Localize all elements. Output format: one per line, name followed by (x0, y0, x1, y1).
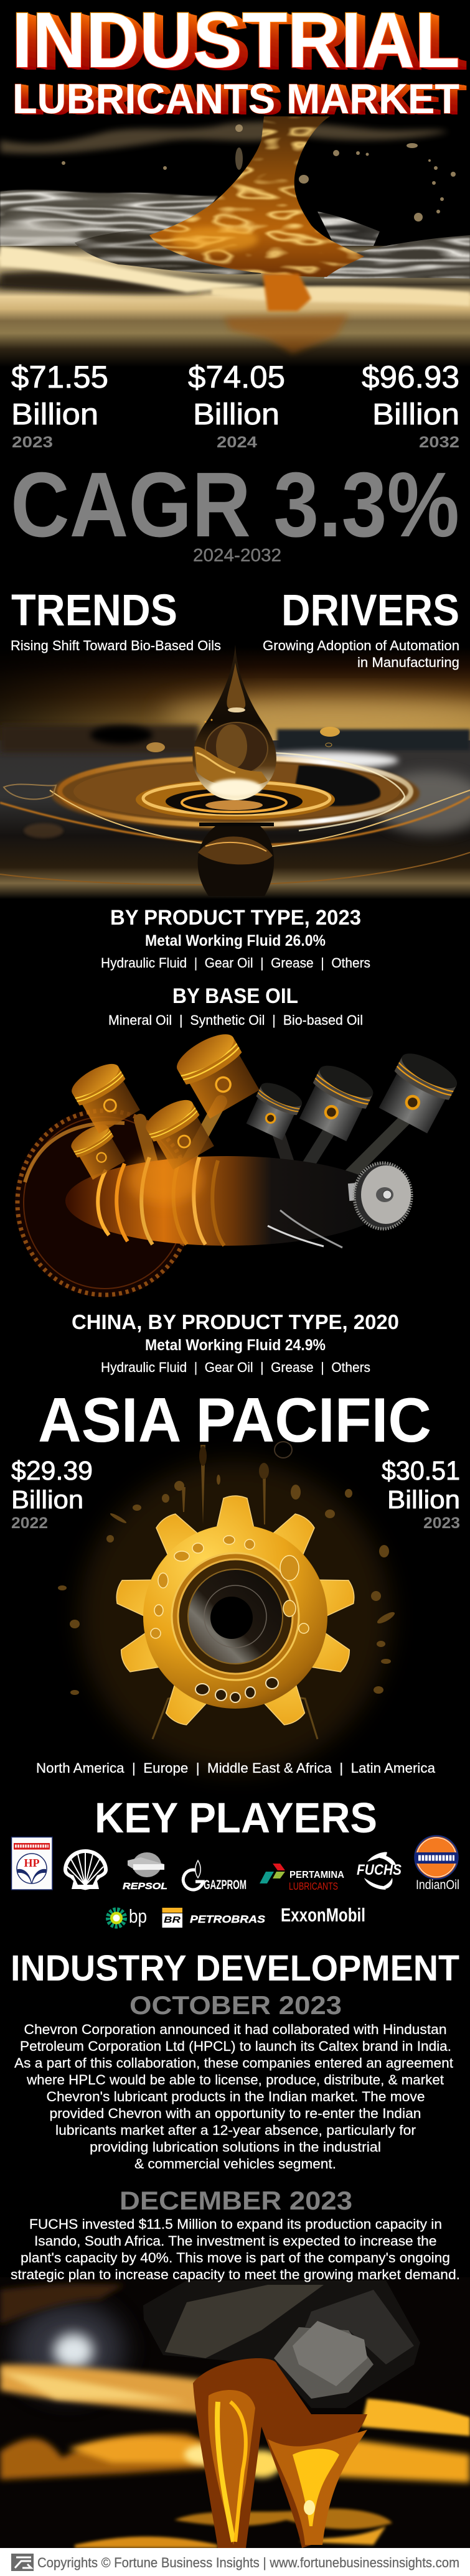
development: October 2023: Chevron Corporation announced it had collaborated with Hindustan (24, 2022, 447, 2037)
logo: Pertamina Lubricants: PERTAMINA (289, 1870, 344, 1880)
logo: FUCHS: FUCHS (357, 1862, 402, 1878)
drop reflection (198, 824, 274, 896)
development: December 2023: Isando, South Africa. The investment is expected to increase the (34, 2233, 437, 2249)
drivers (263, 586, 459, 670)
stat: Asia Pacific 2022: Billion (11, 1485, 83, 1514)
heading: by product type (101, 906, 370, 971)
drivers: in Manufacturing (357, 655, 459, 670)
regions list: North America | Europe | Middle East & Africa | Latin America (36, 1760, 436, 1776)
development: October 2023: Chevron's lubricant products in the Indian market. The move (46, 2089, 425, 2104)
development: December 2023: strategic plan to increase capacity to meet the growing market demand. (11, 2267, 460, 2282)
photo: oil splash (0, 116, 470, 367)
development: October 2023 (14, 1990, 453, 2172)
development: December 2023 (11, 2186, 460, 2282)
stat: Asia Pacific 2022: 2022 (11, 1514, 48, 1532)
logo: IndianOil (415, 1836, 459, 1892)
development: October 2023: where HPLC would be able to license, produce, distribute, & market (26, 2072, 444, 2088)
drivers: Growing Adoption of Automation (263, 638, 459, 653)
logo: HP (11, 1837, 52, 1890)
logo: Petrobras (162, 1908, 266, 1928)
title (12, 0, 460, 123)
stat: 2024 (188, 360, 285, 451)
heading: industry development: INDUSTRY DEVELOPMENT (11, 1948, 459, 1989)
heading: China by product type: CHINA, BY PRODUCT TYPE, 2020 (72, 1310, 399, 1333)
trends: TRENDS (11, 586, 177, 635)
logo: ExxonMobil: ExxonMobil (281, 1904, 365, 1926)
development: December 2023: FUCHS invested $11.5 Million to expand its production capacity in (29, 2216, 442, 2232)
development: October 2023: As a part of this collaboration, these companies entered an agreement (14, 2055, 453, 2071)
heading: by product type: BY PRODUCT TYPE, 2023 (110, 906, 361, 930)
logo: Petrobras: BR (164, 1915, 181, 1925)
CAGR: 2024-2032 (193, 546, 281, 566)
stat: 2023: 2023 (12, 434, 53, 451)
development: October 2023: provided Chevron with an opportunity to re-enter the Indian (50, 2106, 421, 2121)
stat: 2032: Billion (372, 398, 459, 431)
stat: 2032: $96.93 (362, 360, 459, 394)
logo: bp: bp (129, 1905, 147, 1927)
heading: by base oil: Mineral Oil | Synthetic Oil | Bio-based Oil (108, 1012, 363, 1028)
stat: Asia Pacific 2023 (382, 1456, 460, 1532)
logo: Gazprom: GAZPROM (204, 1878, 247, 1892)
stat: 2032 (362, 360, 459, 451)
stat: 2023: $71.55 (11, 360, 108, 394)
logo: Pertamina Lubricants (260, 1864, 344, 1892)
stat: 2024: $74.05 (188, 360, 285, 394)
logo: Gazprom (183, 1860, 247, 1892)
development: October 2023: providing lubrication solutions in the industrial (90, 2139, 381, 2155)
title line 2: LUBRICANTS MARKET: LUBRICANTS MARKET (12, 75, 459, 123)
photo: oil drop and ripples (0, 645, 470, 899)
logo: Shell (63, 1849, 108, 1890)
logo: IndianOil: IndianOil (416, 1878, 459, 1892)
stat: 2024: Billion (193, 398, 280, 431)
stat: 2024: 2024 (217, 434, 257, 451)
logo: Repsol (123, 1852, 167, 1892)
stat: Asia Pacific 2023: $30.51 (382, 1456, 460, 1486)
illustration: engine crankshaft with pistons (15, 1027, 462, 1297)
development: December 2023: DECEMBER 2023 (120, 2186, 352, 2215)
development: October 2023: & commercial vehicles segment. (134, 2156, 336, 2172)
development: December 2023: plant's capacity by 40%. This move is part of the company's ongoing (21, 2250, 450, 2266)
trends (11, 586, 221, 653)
heading: by base oil (108, 984, 363, 1028)
heading: China by product type: Hydraulic Fluid | Gear Oil | Grease | Others (101, 1360, 370, 1375)
logo: Repsol: REPSOL (123, 1881, 167, 1892)
stat: Asia Pacific 2022 (11, 1456, 93, 1532)
development: October 2023: Petroleum Corporation Ltd (HPCL) to launch its Caltex brand in India. (20, 2038, 451, 2054)
illustration: golden gear with oil (58, 1442, 396, 1772)
heading: by product type: Hydraulic Fluid | Gear Oil | Grease | Others (101, 955, 370, 971)
heading: Asia Pacific: ASIA PACIFIC (38, 1386, 431, 1455)
heading: by product type: Metal Working Fluid 26.0% (145, 932, 326, 950)
footer (0, 2548, 470, 2576)
logo: Pertamina Lubricants: LUBRICANTS (289, 1880, 338, 1892)
heading: key players: KEY PLAYERS (95, 1794, 377, 1842)
logo: Petrobras: PETROBRAS (190, 1913, 266, 1925)
heading: China by product type (72, 1310, 399, 1375)
icon: oil droplet (192, 645, 276, 800)
development: October 2023: lubricants market after a 12-year absence, particularly for (55, 2122, 416, 2138)
logo: HP: HP (24, 1857, 40, 1869)
heading: by base oil: BY BASE OIL (172, 984, 298, 1008)
icon: Fortune Business Insights logo (11, 2554, 34, 2571)
photo: oil pouring from machine (0, 2277, 470, 2548)
title line 2: LUBRICANTS MARKET: LUBRICANTS MARKET (12, 75, 459, 123)
stat: Asia Pacific 2022: $29.39 (11, 1456, 93, 1486)
heading: China by product type: Metal Working Fluid 24.9% (145, 1337, 326, 1354)
trends: Rising Shift Toward Bio-Based Oils (11, 638, 221, 653)
logo: bp (108, 1905, 147, 1927)
stat: 2023 (11, 360, 108, 451)
development: October 2023: OCTOBER 2023 (129, 1990, 342, 2020)
logo: FUCHS (357, 1852, 402, 1890)
stat: 2032: 2032 (419, 434, 459, 451)
stat: Asia Pacific 2023: 2023 (423, 1514, 460, 1532)
stat: Asia Pacific 2023: Billion (387, 1485, 460, 1514)
stat: 2023: Billion (11, 398, 98, 431)
